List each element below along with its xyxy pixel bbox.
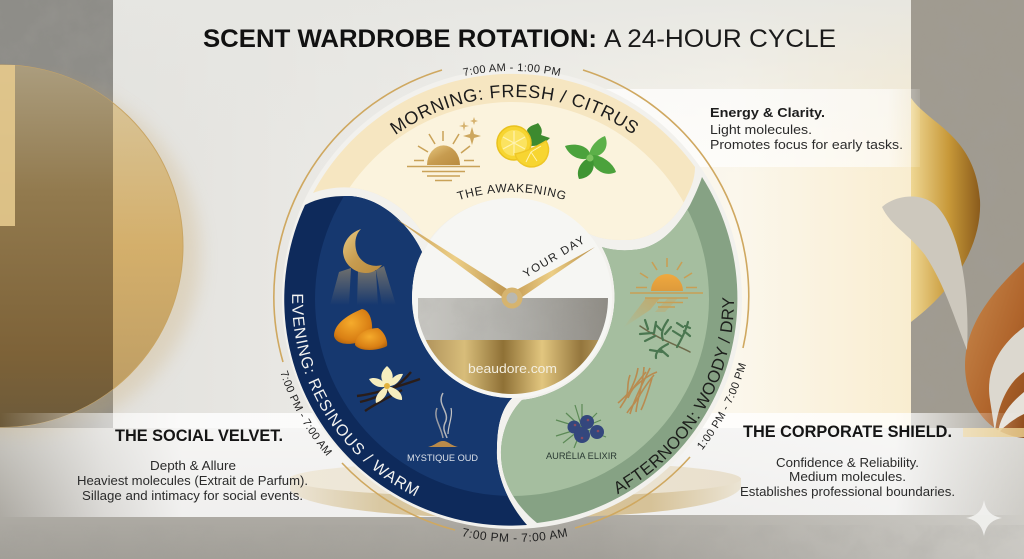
time labels: 1:00 PM - 7:00 PM (698, 362, 746, 450)
background: concrete wall (0, 0, 1024, 440)
white text band: left (0, 413, 520, 517)
time labels (280, 63, 746, 542)
icon: afternoon sun (623, 258, 703, 328)
icon: sunrise (407, 117, 481, 180)
callout: morning: Promotes focus for early tasks. (710, 137, 903, 152)
icon: oud smoke (428, 393, 458, 447)
24-hour gold ring (274, 70, 749, 530)
central bowl (412, 198, 612, 398)
callout: afternoon: Confidence & Reliability. (776, 456, 919, 470)
callout: morning (710, 105, 903, 152)
callout: afternoon (740, 423, 955, 499)
icon: lemon (497, 123, 550, 167)
right sculpture: pale petals (989, 327, 1024, 433)
website label: beaudore.com (468, 361, 557, 376)
evening heading: EVENING: RESINOUS / WARM (292, 294, 420, 496)
time labels: 7:00 AM - 1:00 PM (462, 63, 560, 76)
callout: evening: Heaviest molecules (Extrait de Parfum). (77, 474, 308, 488)
pedestal under wheel (289, 461, 741, 518)
callout: evening: THE SOCIAL VELVET. (115, 427, 283, 445)
wheel backing (282, 69, 742, 529)
panel: evening segment (284, 196, 527, 526)
title: A 24-HOUR CYCLE (604, 25, 836, 53)
icon: mint (565, 136, 616, 179)
icon: cypress sprig (640, 320, 690, 358)
mystique oud label: MYSTIQUE OUD (407, 453, 478, 464)
icon: vetiver root (618, 367, 657, 414)
title: SCENT WARDROBE ROTATION: (203, 25, 597, 53)
white text band: right (510, 413, 1024, 515)
right sculpture: gold leaf (911, 98, 980, 322)
callout: morning: Energy & Clarity. (710, 105, 825, 120)
gold floor strip (963, 428, 1024, 437)
time labels: 7:00 PM - 7:00 AM (280, 370, 332, 456)
panel: afternoon segment (500, 177, 738, 523)
aurelia elixir label: AURÉLIA ELIXIR (546, 451, 617, 462)
your day label: YOUR DAY (521, 234, 588, 281)
gold translucent disc (0, 65, 200, 434)
time labels: 7:00 PM - 7:00 AM (464, 528, 568, 542)
icon: amber resin (334, 309, 387, 350)
callout: afternoon: Establishes professional boundaries. (740, 485, 955, 499)
callout: evening: Sillage and intimacy for social events. (82, 489, 303, 503)
right sculpture: stone leaf (882, 196, 968, 350)
panel: morning segment (313, 74, 695, 243)
morning heading: MORNING: FRESH / CITRUS (390, 84, 638, 134)
icon: crescent moon (330, 229, 396, 305)
background: marble floor (0, 428, 1024, 559)
icon: corner sparkle (966, 500, 1002, 536)
the awakening label: THE AWAKENING (456, 184, 566, 200)
clock hands (395, 218, 595, 308)
callout: afternoon: THE CORPORATE SHIELD. (743, 423, 952, 441)
callout: afternoon: Medium molecules. (789, 470, 906, 484)
callout: evening: Depth & Allure (150, 459, 236, 473)
afternoon heading: AFTERNOON: WOODY / DRY (616, 298, 734, 494)
title (203, 25, 836, 53)
background: light central panel (113, 0, 911, 430)
callout: evening (77, 427, 308, 503)
white text band: top right (600, 89, 920, 167)
icon: vanilla flower (357, 366, 420, 411)
icon: juniper berries (556, 404, 606, 448)
callout: morning: Light molecules. (710, 122, 812, 137)
right sculpture: copper leaf (965, 262, 1024, 438)
